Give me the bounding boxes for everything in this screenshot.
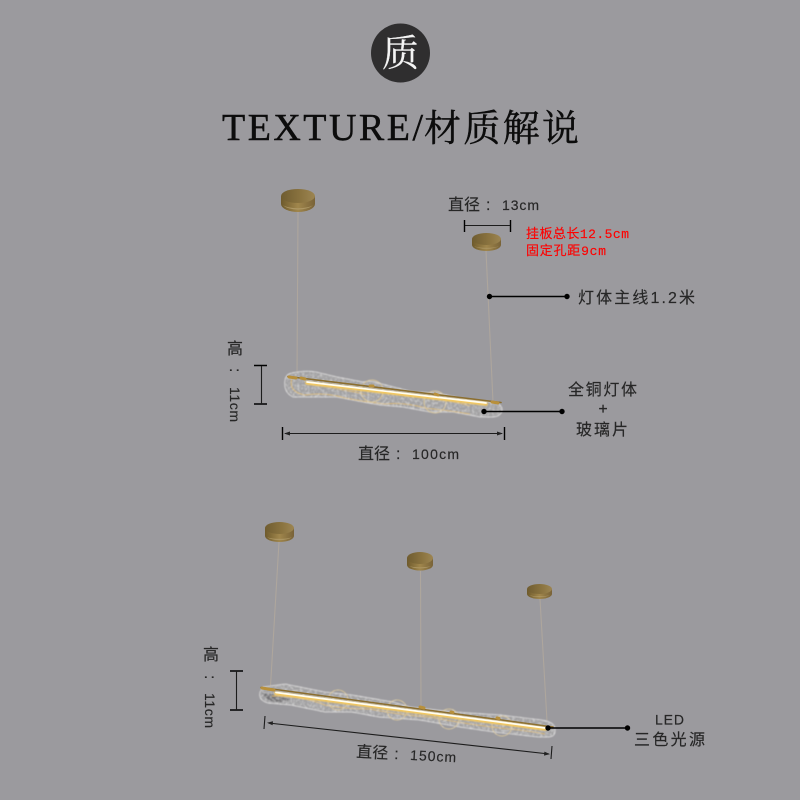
callout: main wire bbox=[487, 289, 695, 307]
ceiling canopy left bbox=[281, 189, 315, 212]
suspension wires bbox=[270, 542, 547, 721]
note: mounting plate: 挂板总长12.5cm bbox=[526, 227, 629, 242]
ceiling canopy middle bbox=[407, 552, 433, 570]
callout: copper body and glass: 全铜灯体 bbox=[568, 381, 637, 399]
gold rail and light strip bbox=[261, 688, 553, 729]
note: mounting plate: 固定孔距9cm bbox=[526, 244, 606, 259]
title bbox=[222, 107, 579, 150]
title: TEXTURE/ bbox=[222, 107, 423, 149]
callout: copper body and glass bbox=[481, 381, 637, 439]
callout: copper body and glass: 玻璃片 bbox=[576, 421, 628, 439]
dimension: length 100cm bbox=[282, 427, 504, 463]
callout: LED tri-color light source: LED bbox=[655, 712, 684, 728]
dimension: canopy diameter 13cm: 13cm bbox=[502, 197, 539, 213]
dimension: length 100cm: : bbox=[396, 446, 400, 463]
dimension: height 11cm upper: 11cm bbox=[227, 387, 243, 422]
glass panel bbox=[260, 684, 555, 737]
callout: main wire: 灯体主线1.2米 bbox=[578, 289, 695, 307]
ceiling canopy left bbox=[265, 522, 294, 542]
gold rail and light strip bbox=[288, 376, 501, 404]
dimension: length 100cm: 100cm bbox=[412, 446, 459, 462]
callout: LED tri-color light source: 三色光源 bbox=[634, 731, 705, 749]
title: 材质解说 bbox=[424, 108, 579, 150]
dimension: height 11cm lower: : bbox=[201, 675, 218, 679]
badge: 质: 质 bbox=[382, 34, 419, 75]
ceiling canopy right bbox=[472, 233, 501, 251]
dimension: canopy diameter 13cm: 直径 bbox=[448, 197, 480, 214]
dimension: height 11cm upper: : bbox=[226, 368, 243, 372]
glass panel bbox=[285, 371, 502, 417]
callout: LED tri-color light source bbox=[545, 712, 705, 749]
dimension: length 150cm: 直径 bbox=[356, 744, 389, 763]
callout: copper body and glass: + bbox=[598, 401, 608, 418]
badge: 质 bbox=[371, 24, 430, 82]
dimension: height 11cm lower bbox=[201, 646, 243, 728]
dimension: canopy diameter 13cm bbox=[448, 196, 539, 232]
dimension: length 150cm bbox=[264, 716, 552, 766]
ceiling canopy right bbox=[527, 584, 552, 599]
dimension: height 11cm upper bbox=[226, 340, 267, 422]
dimension: height 11cm lower: 高 bbox=[203, 646, 219, 664]
dimension: length 100cm: 直径 bbox=[358, 446, 390, 463]
dimension: canopy diameter 13cm: : bbox=[486, 197, 490, 214]
suspension wires bbox=[297, 212, 493, 402]
dimension: height 11cm lower: 11cm bbox=[202, 693, 218, 728]
lamp: 150cm pendant bbox=[260, 522, 555, 737]
dimension: height 11cm upper: 高 bbox=[227, 340, 243, 358]
dimension: length 150cm: : bbox=[394, 746, 399, 763]
lamp: 100cm pendant bbox=[281, 189, 502, 417]
dimension: length 150cm: 150cm bbox=[410, 747, 457, 765]
note: mounting plate bbox=[526, 227, 629, 259]
